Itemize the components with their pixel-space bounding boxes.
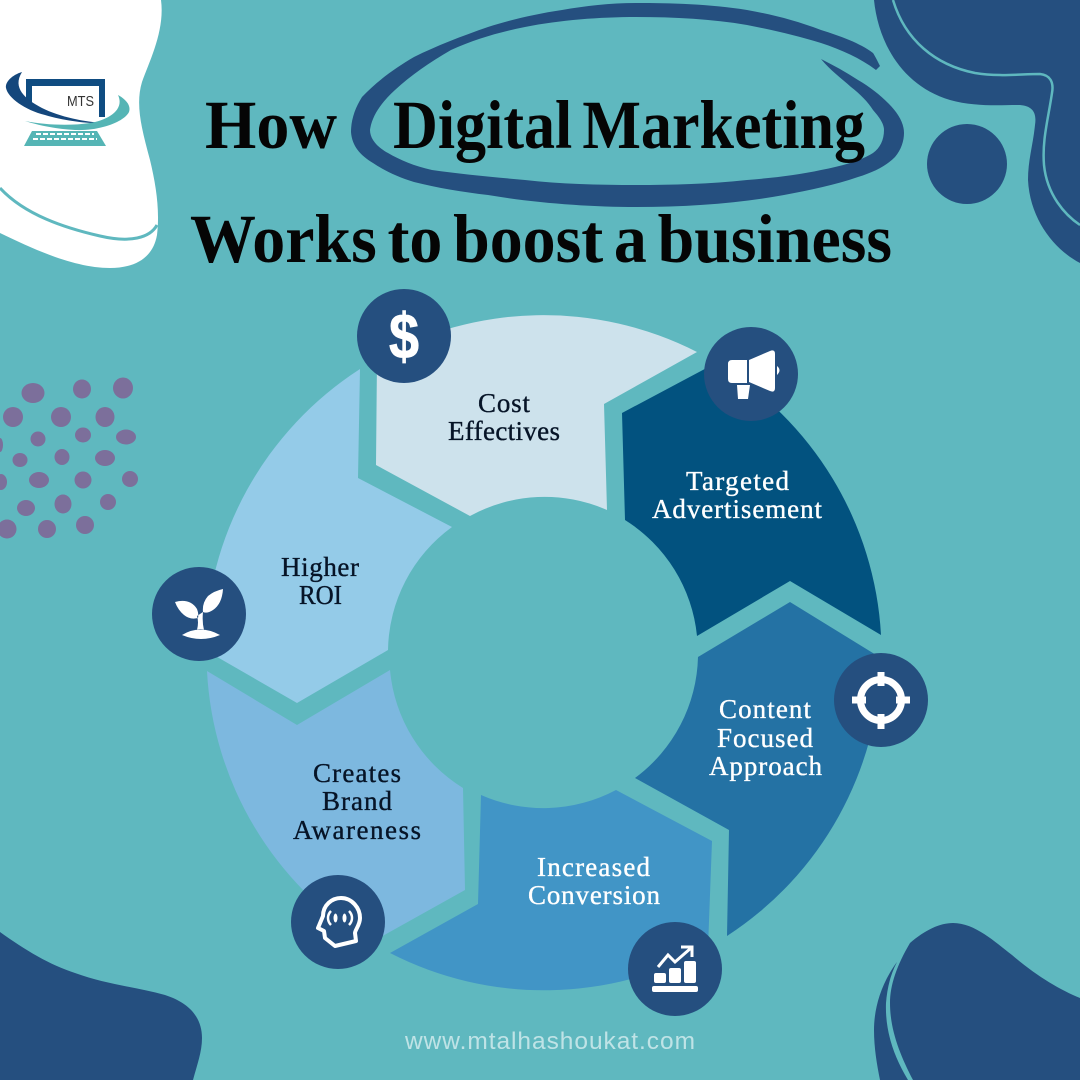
logo: MTS <box>6 72 130 146</box>
circle: top right decoration <box>927 124 1007 204</box>
title: Digital Marketing <box>393 87 865 163</box>
dots pattern <box>0 378 138 538</box>
website url: www.mtalhashoukat.com <box>404 1028 695 1055</box>
blob: top right <box>874 0 1080 263</box>
segment: Creates Brand Awareness: Brand <box>322 786 392 816</box>
segment: Creates Brand Awareness <box>207 670 465 943</box>
segment: Increased Conversion: Increased <box>537 852 650 882</box>
segment: Targeted Advertisement: Advertisement <box>652 494 822 524</box>
title <box>190 87 892 277</box>
segment: Higher ROI: Higher <box>281 552 359 582</box>
segment: Content Focused Approach: Focused <box>717 723 814 753</box>
segment: Increased Conversion: Conversion <box>528 880 660 910</box>
blob: bottom left <box>0 932 202 1080</box>
segment: Targeted Advertisement <box>622 363 881 636</box>
blob: bottom right <box>874 923 1080 1080</box>
icon: megaphone <box>704 327 798 421</box>
segment: Content Focused Approach: Content <box>719 694 811 724</box>
brush ellipse around Digital Marketing <box>351 3 904 207</box>
icon: growth chart <box>628 922 722 1016</box>
icon: dollar <box>357 289 451 383</box>
title: Works to boost a business <box>190 201 892 277</box>
title: How <box>205 87 337 163</box>
icon: dollar: $ <box>389 300 419 372</box>
segment: Higher ROI: ROI <box>299 580 342 610</box>
segment: Cost Effectives <box>376 315 697 516</box>
segment: Increased Conversion <box>390 790 712 990</box>
icon: sprout <box>152 567 246 661</box>
logo: MTS: MTS <box>67 93 94 110</box>
segment: Content Focused Approach: Approach <box>709 751 822 781</box>
segment: Targeted Advertisement: Targeted <box>686 466 790 496</box>
white blob: top left <box>0 0 162 268</box>
segment: Creates Brand Awareness: Awareness <box>293 815 421 845</box>
segment: Cost Effectives: Effectives <box>448 416 560 446</box>
icon: head <box>291 875 385 969</box>
icon: target <box>834 653 928 747</box>
segment: Higher ROI <box>205 369 452 703</box>
segment: Cost Effectives: Cost <box>478 388 530 418</box>
segment: Creates Brand Awareness: Creates <box>313 758 401 788</box>
segment: Content Focused Approach <box>635 602 881 936</box>
